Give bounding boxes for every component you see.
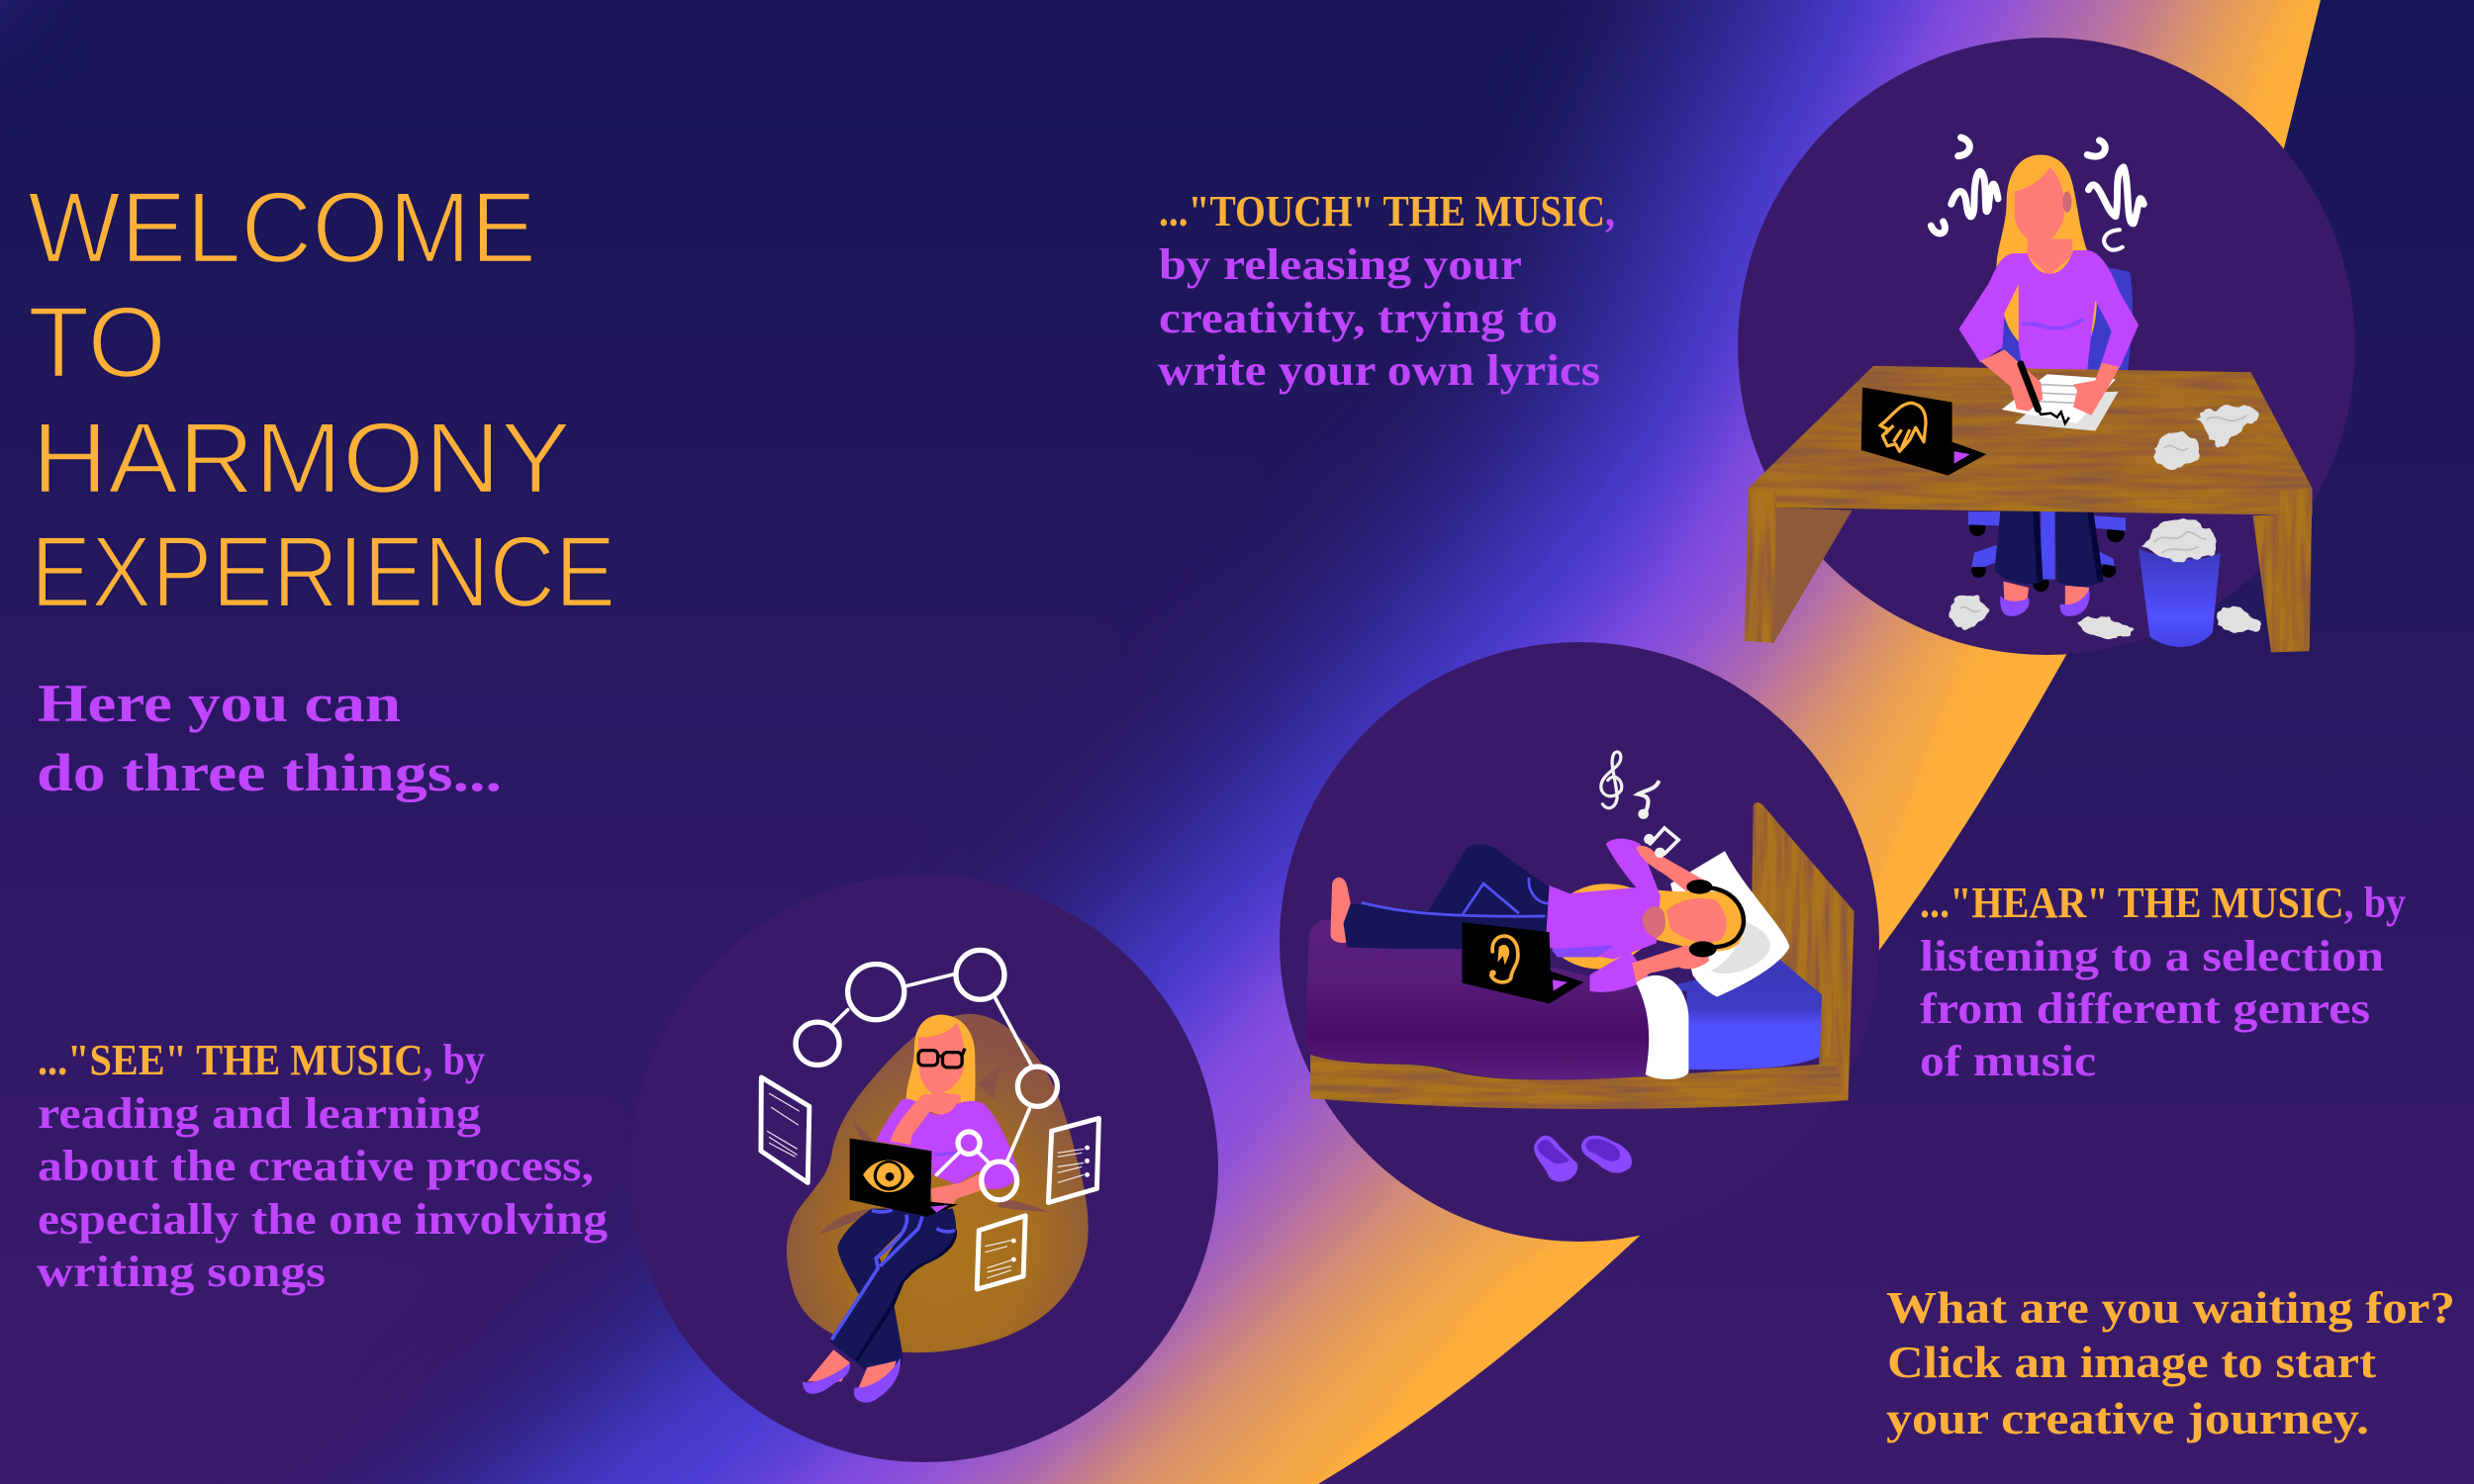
text block: hear the music: of music	[1920, 1037, 2096, 1085]
text block: touch the music	[1158, 187, 1615, 395]
text block: see the music	[37, 1036, 608, 1296]
text block: hear the music	[1920, 879, 2406, 1085]
call to action	[1886, 1282, 2455, 1443]
icon: laptop with eye	[850, 1138, 958, 1217]
icon: slippers	[1534, 1136, 1632, 1182]
icon: laptop with hand	[1861, 388, 1986, 476]
call to action: your creative journey.	[1886, 1393, 2369, 1443]
panel: touch illustration	[1738, 38, 2355, 655]
icon: paper and writing hand	[1980, 349, 2120, 430]
panel: hear illustration	[1280, 642, 1879, 1242]
title: WELCOME	[28, 171, 536, 284]
text block: see the music: ..."SEE" THE MUSIC, by	[38, 1036, 485, 1084]
icon: bed	[1305, 802, 1855, 1109]
title: EXPERIENCE	[31, 515, 616, 628]
icon: reader figure	[803, 1014, 1019, 1403]
subtitle	[37, 674, 502, 802]
icon: laptop with ear	[1462, 922, 1583, 1003]
subtitle: do three things...	[37, 743, 502, 802]
icon: crumpled paper	[1950, 406, 2260, 638]
icon: beanbag	[787, 1014, 1089, 1352]
icon: blanket	[1636, 975, 1688, 1079]
icon: desk	[1745, 366, 2312, 652]
text block: touch the music: write your own lyrics	[1158, 346, 1600, 395]
text block: touch the music: creativity, trying to	[1159, 294, 1558, 342]
icon: music notes	[1601, 752, 1678, 858]
text block: touch the music: by releasing your	[1159, 240, 1522, 289]
title: TO	[28, 286, 166, 399]
icon: waste bin	[2139, 518, 2221, 647]
icon: listener figure	[1330, 839, 1744, 992]
call to action: What are you waiting for?	[1886, 1282, 2455, 1333]
subtitle: Here you can	[38, 674, 401, 733]
text block: see the music: reading and learning	[38, 1089, 481, 1138]
icon: office chair	[1968, 267, 2133, 592]
icon: tension squiggles	[1931, 138, 2143, 250]
icon: idea network	[796, 950, 1057, 1200]
panel: see illustration	[630, 875, 1218, 1462]
title: HARMONY	[32, 402, 571, 514]
text block: see the music: writing songs	[37, 1248, 326, 1296]
title	[28, 171, 616, 628]
text block: hear the music: from different genres	[1920, 984, 2370, 1033]
text block: see the music: about the creative process,	[38, 1142, 594, 1190]
text block: hear the music: ..."HEAR" THE MUSIC, by	[1920, 879, 2406, 927]
text block: hear the music: listening to a selection	[1920, 932, 2384, 980]
icon: writer figure	[1958, 154, 2139, 616]
icon: pillow	[1670, 851, 1789, 997]
icon: floating documents	[761, 1077, 1098, 1289]
text block: touch the music: ..."TOUCH" THE MUSIC,	[1159, 187, 1615, 235]
call to action: Click an image to start	[1887, 1337, 2377, 1387]
text block: see the music: especially the one involving	[38, 1195, 608, 1244]
